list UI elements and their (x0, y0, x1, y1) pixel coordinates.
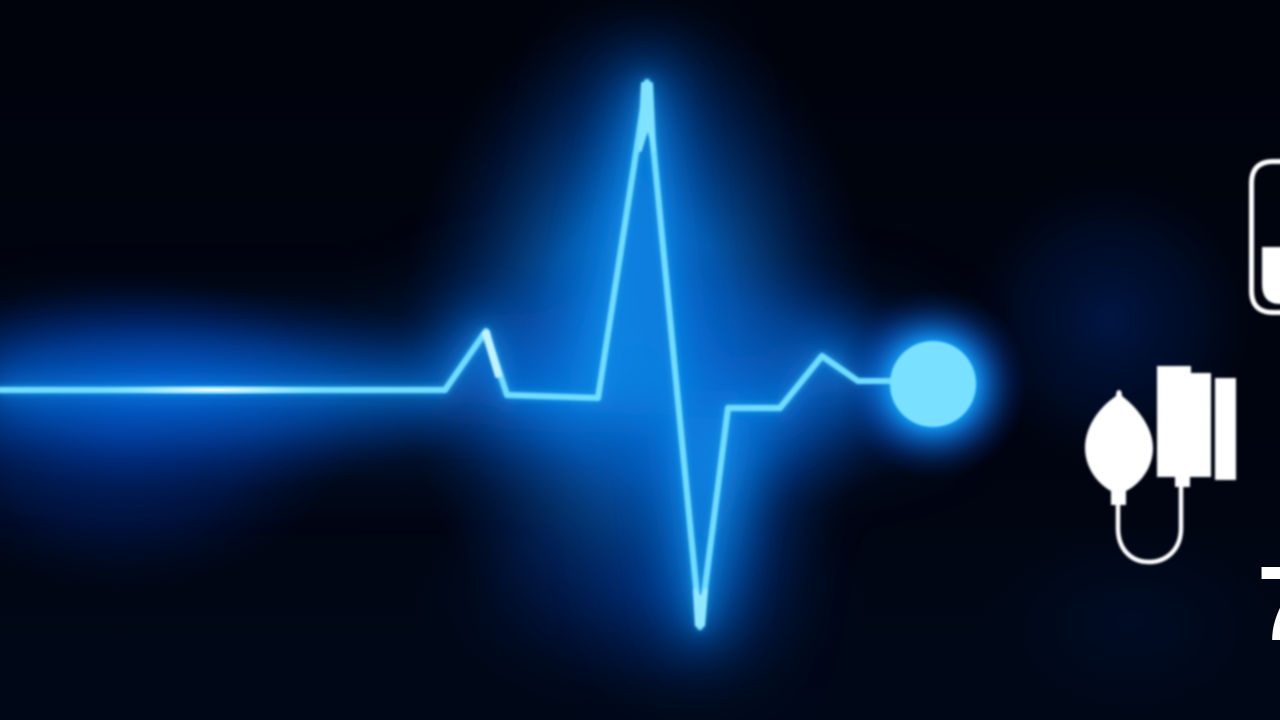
pulse dot (890, 341, 976, 427)
background: left haze (0, 270, 350, 590)
flare: bright streak on flat line (95, 385, 335, 395)
heartbeat trace (0, 82, 895, 627)
glow: band behind trace (400, 245, 960, 525)
glow: central spike bloom (400, 0, 880, 680)
glow: left flat line bloom (0, 285, 500, 495)
glow: fill between spike legs (560, 82, 760, 627)
background: lower centre haze (410, 460, 870, 720)
background: lower right haze (980, 520, 1280, 720)
background: right haze (960, 170, 1260, 470)
icon: capsule (1252, 162, 1280, 312)
glow: pulse dot halo (837, 288, 1029, 480)
icon: blood pressure cuff and bulb (1085, 366, 1236, 562)
glow: wide halo around trace (0, 82, 895, 627)
